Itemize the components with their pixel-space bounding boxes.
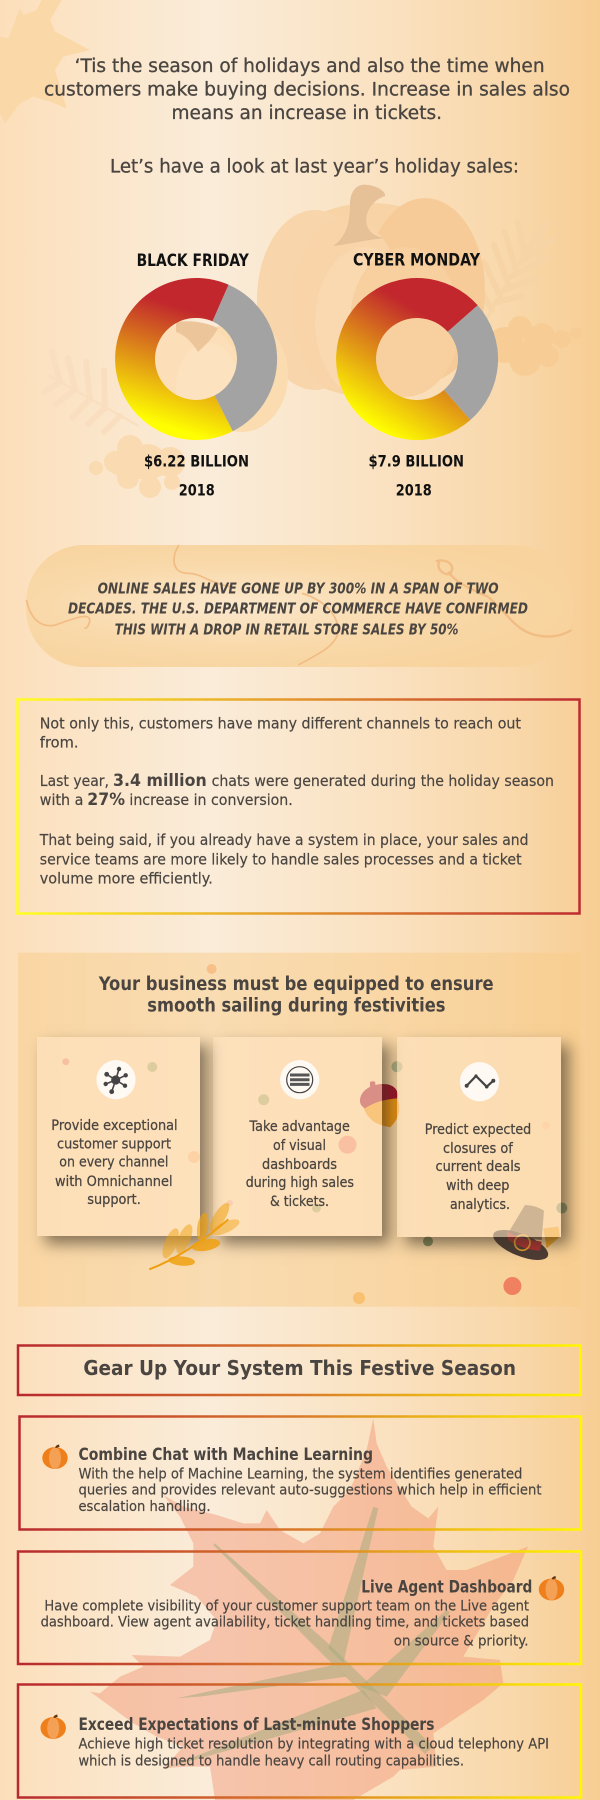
heading frame: gear up	[18, 1346, 580, 1395]
card text: customer support	[57, 1136, 171, 1152]
card text: Predict expected	[425, 1122, 531, 1138]
bordered text box: channels and conversion: from.	[40, 733, 78, 751]
card text: with deep	[446, 1178, 510, 1194]
card text: during high sales	[246, 1175, 354, 1191]
feature box: combine chat with machine learning: Combine Chat with Machine Learning	[78, 1445, 373, 1464]
background small pumpkin	[140, 318, 288, 433]
icon: dashboard	[280, 1060, 319, 1099]
icon: pumpkin	[42, 1444, 68, 1469]
bordered text box: channels and conversion: service teams are more likely to handle sales processes and a ticket	[40, 850, 522, 868]
feature box: live agent dashboard: Live Agent Dashboard	[361, 1577, 532, 1596]
chart labels: Cyber Monday	[353, 250, 481, 499]
chart labels: Cyber Monday: $7.9 BILLION	[368, 452, 464, 470]
card text: of visual	[273, 1138, 326, 1154]
icon: omnichannel hub	[96, 1060, 136, 1099]
chart labels: Black Friday: 2018	[179, 480, 215, 499]
donut chart: Cyber Monday	[336, 278, 498, 440]
feature box: combine chat with machine learning: escalation handling.	[78, 1499, 210, 1515]
feature box: last-minute shoppers: which is designed to handle heavy call routing capabilities.	[78, 1753, 464, 1769]
feature box: live agent dashboard: Have complete visibility of your customer support team on the Live agent	[44, 1599, 529, 1615]
card text: closures of	[443, 1141, 514, 1157]
card text	[51, 1118, 178, 1208]
callout pill: online sales	[26, 545, 573, 667]
card text	[246, 1119, 354, 1210]
card text: analytics.	[450, 1197, 510, 1213]
intro text: means an increase in tickets.	[172, 103, 442, 124]
card text: on every channel	[59, 1155, 168, 1171]
feature box: combine chat with machine learning: queries and provides relevant auto-suggestions which help in efficient	[78, 1482, 542, 1498]
bordered text box: channels and conversion: 27%	[87, 790, 125, 810]
intro text: ‘Tis the season of holidays and also the time when	[75, 56, 545, 77]
panel: business equipped	[18, 953, 580, 1307]
bordered text box: channels and conversion: 3.4 million	[113, 771, 207, 791]
card text: current deals	[436, 1159, 520, 1175]
chart labels: Black Friday: BLACK FRIDAY	[137, 251, 249, 271]
bordered text box: channels and conversion: volume more efficiently.	[40, 869, 213, 887]
intro text: customers make buying decisions. Increase in sales also	[44, 80, 570, 101]
card text	[425, 1122, 531, 1213]
card: deep analytics	[397, 1037, 561, 1237]
feature box: last-minute shoppers	[18, 1684, 581, 1798]
pilgrim hat decoration	[489, 1205, 560, 1266]
bordered text box: channels and conversion: Not only this, customers have many different channels to reach out	[40, 714, 521, 732]
feature box: live agent dashboard: on source & priority.	[394, 1634, 528, 1650]
card: visual dashboards	[213, 1037, 382, 1236]
panel heading: Your business must be equipped to ensure	[98, 974, 494, 995]
bordered text box: channels and conversion	[18, 700, 580, 914]
intro text	[44, 56, 570, 124]
chart labels: Cyber Monday: CYBER MONDAY	[353, 250, 481, 270]
chart labels: Black Friday: $6.22 BILLION	[144, 452, 249, 470]
chart labels: Cyber Monday: 2018	[396, 480, 432, 499]
bordered text box: channels and conversion: That being said, if you already have a system in place, your sales and	[39, 831, 529, 849]
donut chart: Black Friday	[115, 278, 277, 440]
background large pumpkin	[257, 185, 485, 397]
bordered text box: channels and conversion: with a	[40, 791, 83, 809]
bordered text box: channels and conversion: increase in conversion.	[129, 791, 293, 809]
heading frame: gear up: Gear Up Your System This Festive Season	[83, 1356, 516, 1380]
background left fern	[44, 352, 137, 432]
card text: dashboards	[262, 1157, 337, 1173]
card text: with Omnichannel	[55, 1174, 173, 1190]
panel heading: smooth sailing during festivities	[147, 996, 446, 1017]
acorn decoration	[360, 1081, 399, 1127]
feature box: combine chat with machine learning	[20, 1416, 581, 1530]
background lower-left oak leaf	[89, 435, 185, 498]
icon: analytics line	[460, 1062, 499, 1101]
callout pill: online sales: THIS WITH A DROP IN RETAIL STORE SALES BY 50%	[115, 620, 459, 638]
large maple leaf background	[90, 1418, 528, 1800]
feature box: live agent dashboard: dashboard. View agent availability, ticket handling time, and tickets based	[41, 1615, 529, 1631]
bordered text box: channels and conversion: Last year,	[40, 772, 109, 790]
icon: pumpkin	[40, 1714, 66, 1739]
background right fern	[478, 222, 552, 318]
confetti dots	[62, 964, 567, 1304]
feature box: last-minute shoppers: Exceed Expectations of Last-minute Shoppers	[78, 1715, 435, 1734]
card text: Provide exceptional	[51, 1118, 178, 1134]
card: omnichannel support	[37, 1037, 200, 1236]
callout pill: online sales: ONLINE SALES HAVE GONE UP BY 300% IN A SPAN OF TWO	[98, 579, 499, 597]
feature box: live agent dashboard	[18, 1552, 581, 1664]
feature box: combine chat with machine learning: With the help of Machine Learning, the system identifies generated	[78, 1466, 522, 1482]
background maple leaf top left	[0, 0, 90, 123]
panel heading	[98, 974, 494, 1017]
icon: pumpkin	[539, 1576, 564, 1600]
chart labels: Black Friday	[137, 251, 249, 499]
bordered text box: channels and conversion: chats were generated during the holiday season	[212, 772, 554, 790]
intro lead-in heading: Let’s have a look at last year’s holiday sales:	[110, 156, 519, 177]
feature box: last-minute shoppers: Achieve high ticket resolution by integrating with a cloud telephony API	[78, 1736, 549, 1752]
card text: Take advantage	[249, 1119, 350, 1135]
background right oak leaf	[487, 316, 582, 376]
card text: support.	[87, 1192, 141, 1208]
card text: & tickets.	[270, 1194, 329, 1210]
